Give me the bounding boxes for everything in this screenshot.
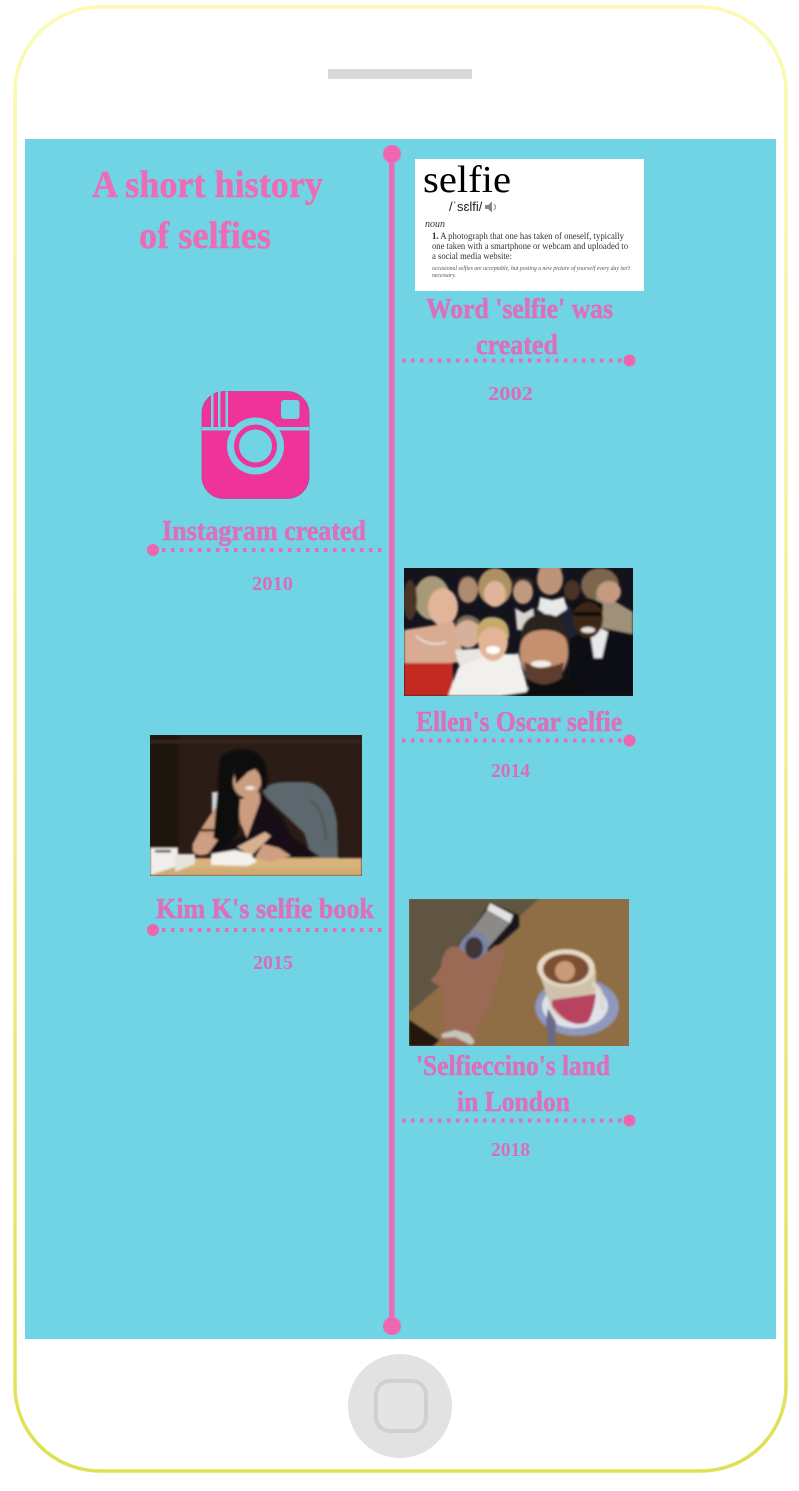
home button — [348, 1354, 452, 1458]
event heading: Word 'selfie' was — [426, 294, 613, 325]
event heading: Ellen's Oscar selfie — [416, 707, 622, 738]
photo: selfieccino coffee and phone — [409, 899, 629, 1046]
dictionary definition image: selfie — [423, 159, 511, 201]
dictionary definition image: /ˈsɛlfi/ — [449, 199, 483, 214]
dotted connector — [147, 544, 384, 556]
dotted connector — [147, 924, 384, 936]
dotted connector — [402, 734, 636, 746]
screen panel — [25, 139, 776, 1339]
title — [92, 164, 323, 257]
year: 2014 — [491, 760, 530, 782]
timeline axis — [383, 145, 401, 1335]
event: Instagram 2010 — [147, 392, 384, 595]
dictionary definition image: necessary. — [432, 273, 456, 279]
event heading: Instagram created — [162, 516, 366, 547]
year: 2002 — [488, 383, 533, 405]
icon: Instagram camera — [202, 392, 309, 498]
event heading: in London — [457, 1087, 570, 1118]
event heading — [416, 1051, 610, 1118]
speaker bar — [328, 69, 472, 79]
event heading: created — [476, 330, 558, 361]
dictionary definition image: 1. A photograph that one has taken of oneself, typically — [432, 231, 624, 242]
dotted connector — [402, 354, 636, 366]
dictionary definition image: occasional selfies are acceptable, but posting a new picture of yourself every day isn't — [432, 265, 630, 272]
dictionary definition image — [415, 159, 644, 291]
event: Ellen 2014 — [402, 562, 636, 782]
dictionary definition image: noun — [425, 219, 445, 230]
year: 2015 — [253, 952, 293, 974]
event: Selfieccino 2018 — [402, 899, 636, 1161]
year: 2018 — [491, 1139, 530, 1161]
event heading: Kim K's selfie book — [156, 894, 374, 925]
event: word selfie 2002 — [402, 159, 644, 405]
title: A short history — [92, 164, 323, 206]
title: of selfies — [139, 215, 271, 257]
year: 2010 — [252, 573, 293, 595]
event: Kim K book 2015 — [147, 735, 384, 974]
dictionary definition image: a social media website: — [432, 252, 512, 262]
dictionary definition image: one taken with a smartphone or webcam and uploaded to — [432, 242, 628, 252]
event heading — [426, 294, 613, 361]
photo: Oscar group selfie — [403, 562, 633, 696]
photo: Kim Kardashian book signing — [150, 735, 362, 876]
dotted connector — [402, 1114, 636, 1126]
event heading: 'Selfieccino's land — [416, 1051, 610, 1082]
